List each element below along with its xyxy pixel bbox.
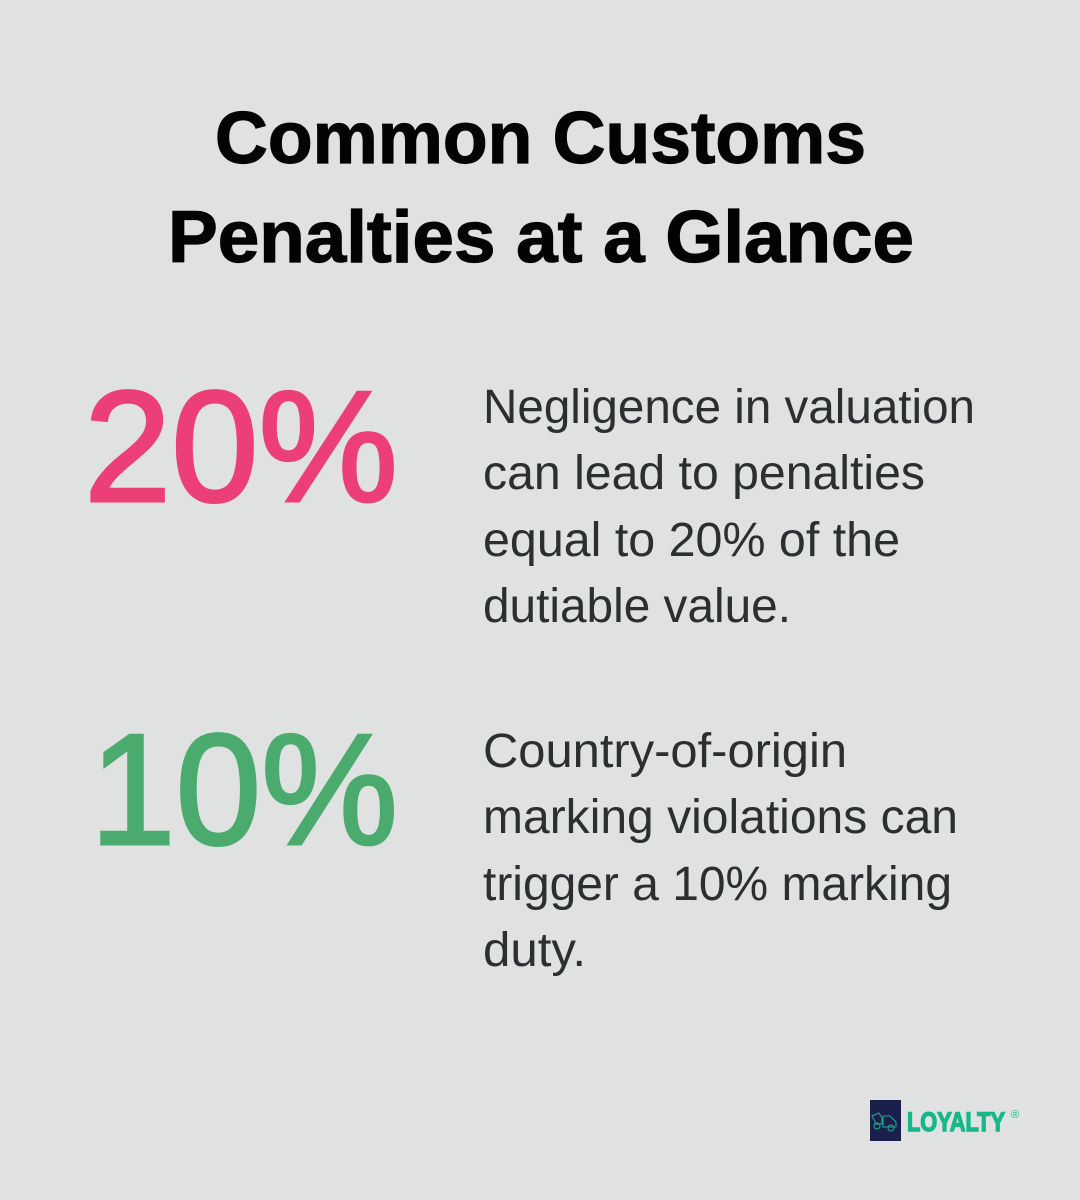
wordmark: LOYALTY <box>907 1107 1005 1137</box>
title <box>168 98 914 278</box>
text block: negligence in valuation: equal to 20% of the <box>483 514 900 567</box>
logo: Loyalty <box>870 1100 1019 1141</box>
registered mark: ® <box>1011 1109 1019 1121</box>
text block: country-of-origin marking <box>483 725 958 977</box>
title: Common Customs <box>215 98 866 179</box>
text block: negligence in valuation: can lead to penalties <box>483 447 925 500</box>
text block: country-of-origin marking: marking violations can <box>483 791 958 844</box>
stat: 20%: 20% <box>84 359 398 535</box>
text block: country-of-origin marking: duty. <box>483 924 586 977</box>
text block: country-of-origin marking: Country-of-origin <box>483 725 847 778</box>
text block: negligence in valuation: dutiable value. <box>483 580 791 633</box>
stat: 10%: 10% <box>90 702 398 878</box>
text block: negligence in valuation: Negligence in valuation <box>483 381 975 434</box>
text block: negligence in valuation <box>483 381 975 633</box>
icon: truck on navy square <box>870 1100 901 1141</box>
text block: country-of-origin marking: trigger a 10% marking <box>483 858 952 911</box>
title: Penalties at a Glance <box>168 197 914 278</box>
